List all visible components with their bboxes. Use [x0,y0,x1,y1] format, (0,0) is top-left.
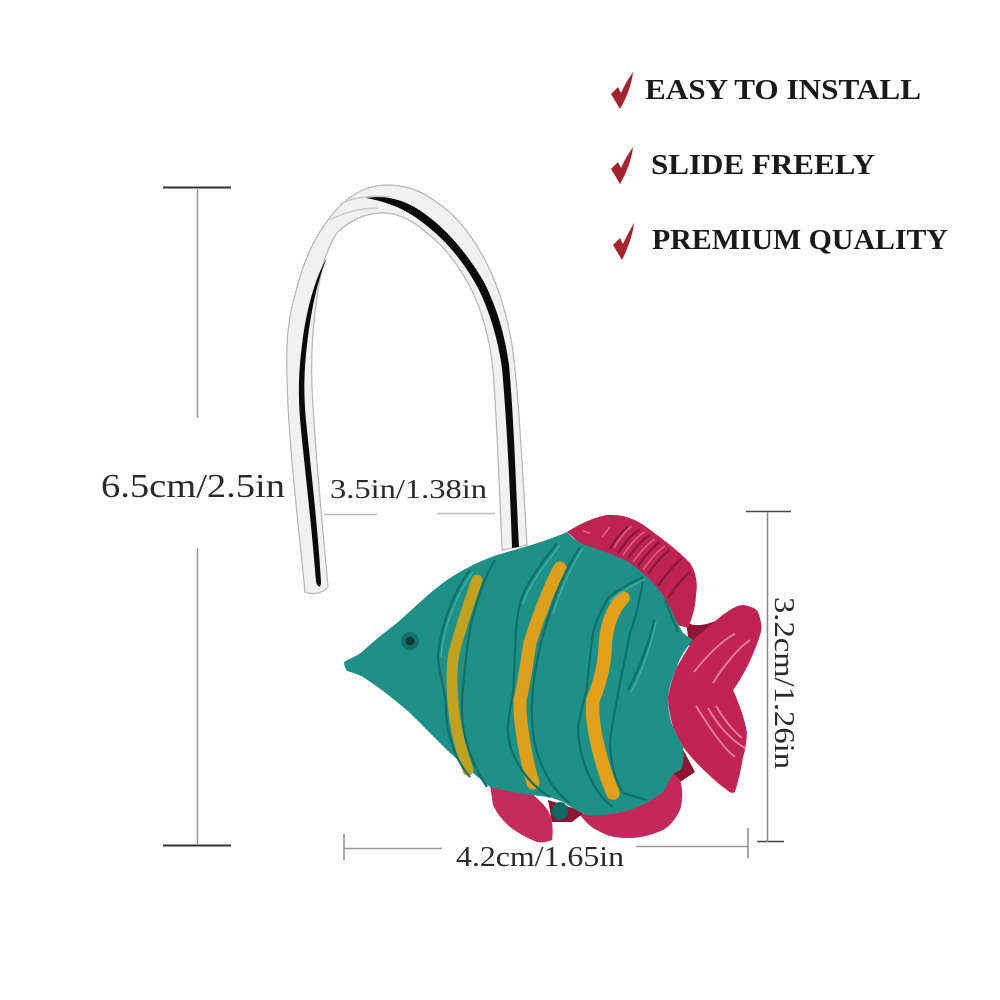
dimension: fish width [344,828,748,873]
feature: slide freely: SLIDE FREELY [651,149,875,181]
feature: premium quality: PREMIUM QUALITY [652,224,948,256]
eye [401,632,419,650]
dimension: hook width: 3.5in/1.38in [330,474,488,504]
yellow stripe 3 [593,598,623,793]
lower right fin [577,772,682,838]
dimension: fish height: 3.2cm/1.26in [768,597,799,769]
hook [287,185,527,594]
hook fold line [330,196,390,220]
dimension: fish height [746,512,799,842]
hook tube [287,185,527,594]
dorsal fin ridges [610,527,690,598]
lower left fin [490,785,553,842]
left black reflection [299,258,327,586]
fish [344,515,761,842]
dorsal fin highlights [583,526,665,570]
yellow stripe 1 [452,580,477,770]
yellow stripe 2 [520,568,560,783]
dimension: fish width: 4.2cm/1.65in [456,842,624,873]
body grooves [438,543,678,807]
fin notch [548,800,585,822]
body relief highlights [441,545,656,692]
tail shadow [660,616,725,790]
dimension: overall height: 6.5cm/2.5in [101,468,285,505]
tail fin [668,605,761,793]
icon: check mark 2 [611,147,633,184]
dimension: overall height [101,188,285,846]
icon: check mark 1 [611,72,633,109]
dorsal fin [567,515,697,628]
body [344,532,693,815]
tail ridges [694,634,750,757]
feature: easy to install: EASY TO INSTALL [645,74,921,106]
right black reflection [366,197,519,548]
icon: check mark 3 [613,223,634,260]
